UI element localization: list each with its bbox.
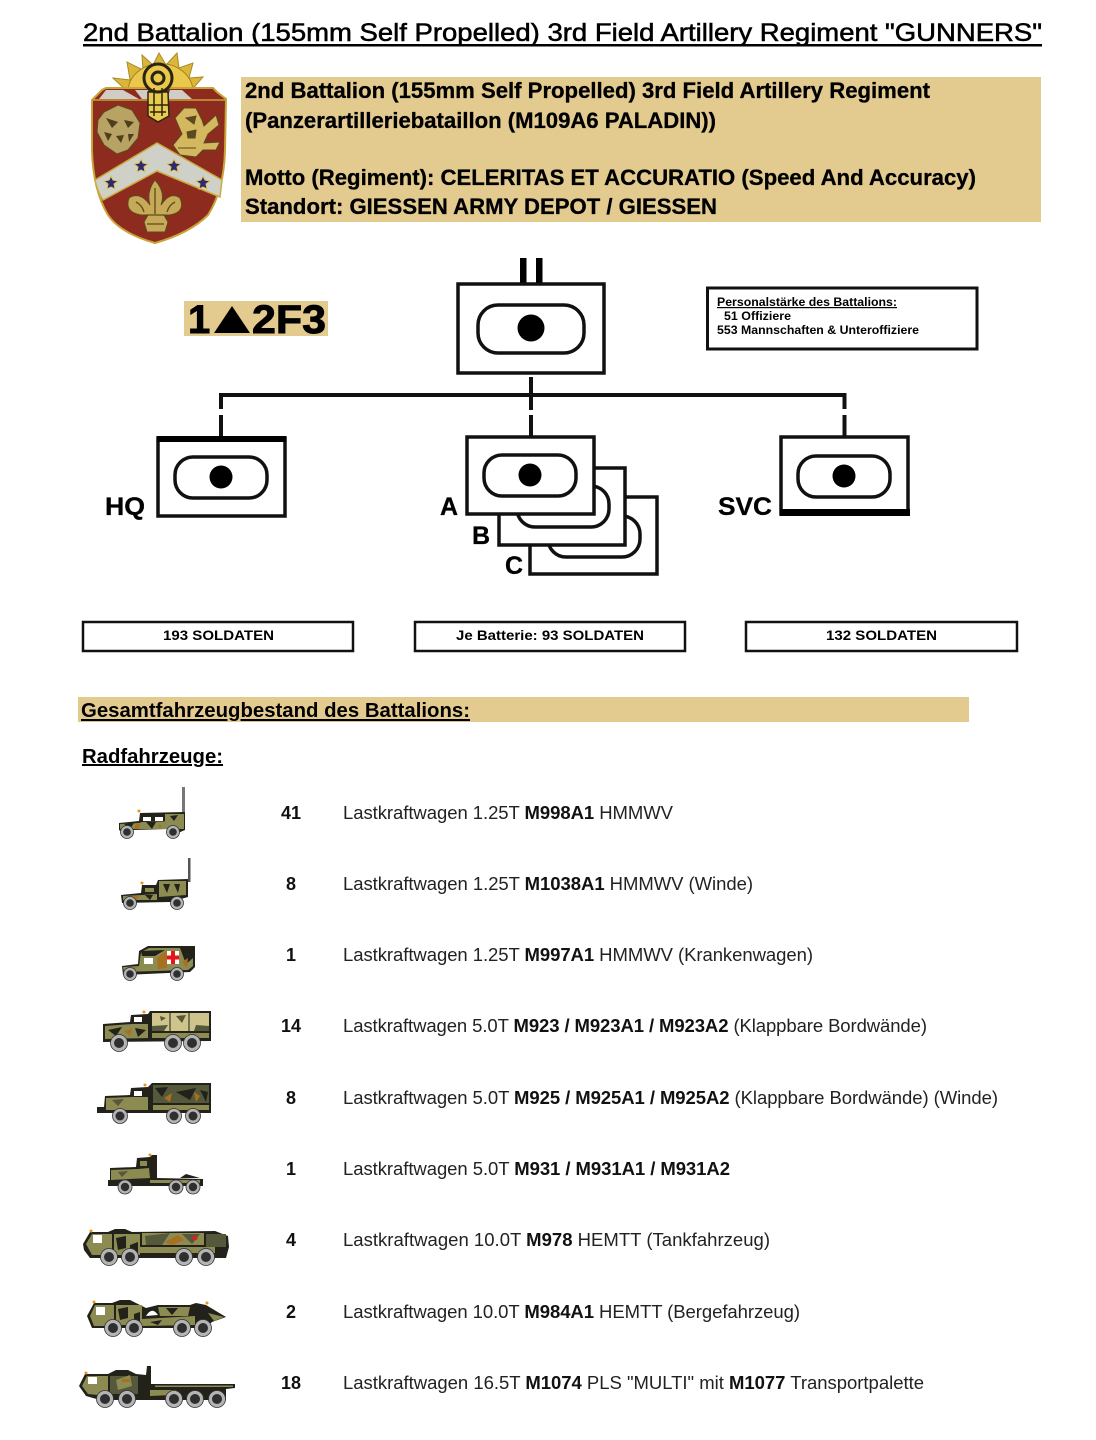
count and label: M984A1: 2 [286, 1302, 296, 1322]
vehicle icon: M998A1 [119, 787, 185, 838]
org chart: HQ company [105, 436, 286, 521]
subheading: Radfahrzeuge: [82, 746, 223, 768]
org chart: batteries A B C: B [472, 522, 490, 550]
count and label: M1038A1: Lastkraftwagen 1.25T M1038A1 HMMWV (Winde) [343, 873, 753, 894]
strength box: SVC [746, 622, 1017, 651]
vehicle icon: M997A1 ambulance [122, 946, 195, 980]
count and label: M997A1: 1 [286, 945, 296, 965]
panel: battalion info [241, 77, 1041, 222]
vehicle icon: M1074 PLS [79, 1366, 235, 1408]
section heading bar [78, 697, 969, 722]
count and label: M997A1: Lastkraftwagen 1.25T M997A1 HMMWV (Krankenwagen) [343, 944, 813, 965]
strength box: HQ: 193 SOLDATEN [163, 627, 274, 643]
org chart: HQ company: HQ [105, 493, 145, 521]
chevron [95, 143, 222, 200]
panel: battalion info: Motto (Regiment): CELERITAS ET ACCURATIO (Speed And Accuracy) [245, 165, 976, 190]
count and label: M984A1: Lastkraftwagen 10.0T M984A1 HEMTT (Bergefahrzeug) [343, 1301, 800, 1322]
org chart: batteries A B C: C [505, 552, 523, 580]
org chart: batteries A B C: A [440, 493, 458, 521]
lion face left [97, 105, 140, 154]
panel: battalion info: Standort: GIESSEN ARMY DEPOT / GIESSEN [245, 194, 717, 219]
count and label: M931: Lastkraftwagen 5.0T M931 / M931A1 / M931A2 [343, 1158, 730, 1179]
count and label: M931: 1 [286, 1159, 296, 1179]
shield body [92, 88, 226, 243]
org chart: SVC company: SVC [718, 493, 772, 521]
strength box: SVC: 132 SOLDATEN [826, 627, 937, 643]
strength box: HQ [83, 622, 353, 651]
org chart: SVC company [718, 437, 910, 521]
unit designation 1▲2F3: 1 [188, 298, 210, 342]
section heading bar: Gesamtfahrzeugbestand des Battalions: [81, 699, 470, 722]
unit designation 1▲2F3: 2F3 [252, 298, 326, 342]
panel: battalion info: 2nd Battalion (155mm Self Propelled) 3rd Field Artillery Regiment [245, 78, 931, 103]
count and label: M978: Lastkraftwagen 10.0T M978 HEMTT (Tankfahrzeug) [343, 1229, 770, 1250]
org chart connector lines [221, 377, 844, 437]
count and label: M925: Lastkraftwagen 5.0T M925 / M925A1 / M925A2 (Klappbare Bordwände) (Winde) [343, 1087, 998, 1108]
vehicle icon: M978 HEMTT tanker [83, 1229, 229, 1266]
fleur-de-lis [128, 180, 182, 232]
count and label: M1038A1: 8 [286, 874, 296, 894]
vehicle icon: M925 [97, 1083, 211, 1124]
title: 2nd Battalion (155mm Self Propelled) 3rd Field Artillery Regiment "GUNNERS" [83, 19, 1042, 47]
count and label: M1074: 18 [281, 1373, 301, 1393]
vehicle icon: M923 [103, 1010, 211, 1052]
key emblem [148, 92, 169, 122]
count and label: M925: 8 [286, 1088, 296, 1108]
unit designation 1▲2F3 [184, 298, 328, 342]
count and label: M923: 14 [281, 1016, 301, 1036]
lion right [173, 108, 220, 157]
count and label: M1074: Lastkraftwagen 16.5T M1074 PLS "MULTI" mit M1077 Transportpalette [343, 1372, 924, 1393]
stars [104, 159, 210, 189]
icon: regimental crest [92, 53, 226, 243]
panel: battalion info: (Panzerartilleriebataillon (M109A6 PALADIN)) [245, 108, 716, 133]
count and label: M998A1: Lastkraftwagen 1.25T M998A1 HMMWV [343, 802, 674, 823]
count and label: M978: 4 [286, 1230, 296, 1250]
strength box: batteries: Je Batterie: 93 SOLDATEN [456, 627, 644, 643]
count and label: M923: Lastkraftwagen 5.0T M923 / M923A1 / M923A2 (Klappbare Bordwände) [343, 1015, 927, 1036]
vehicle icon: M1038A1 [121, 858, 190, 910]
vehicle icon: M931 tractor [108, 1154, 203, 1194]
callout: personnel strength: 553 Mannschaften & Unteroffiziere [717, 323, 919, 337]
vehicle icon: M984A1 HEMTT wrecker [87, 1300, 226, 1336]
callout: personnel strength: Personalstärke des Battalions: [717, 295, 897, 309]
sun rays [113, 53, 203, 92]
callout: personnel strength: 51 Offiziere [724, 309, 791, 323]
count and label: M998A1: 41 [281, 803, 301, 823]
org chart: batteries A B C [440, 437, 657, 580]
strength box: batteries [415, 622, 685, 651]
org chart: battalion symbol [458, 258, 604, 373]
callout: personnel strength [708, 288, 977, 349]
